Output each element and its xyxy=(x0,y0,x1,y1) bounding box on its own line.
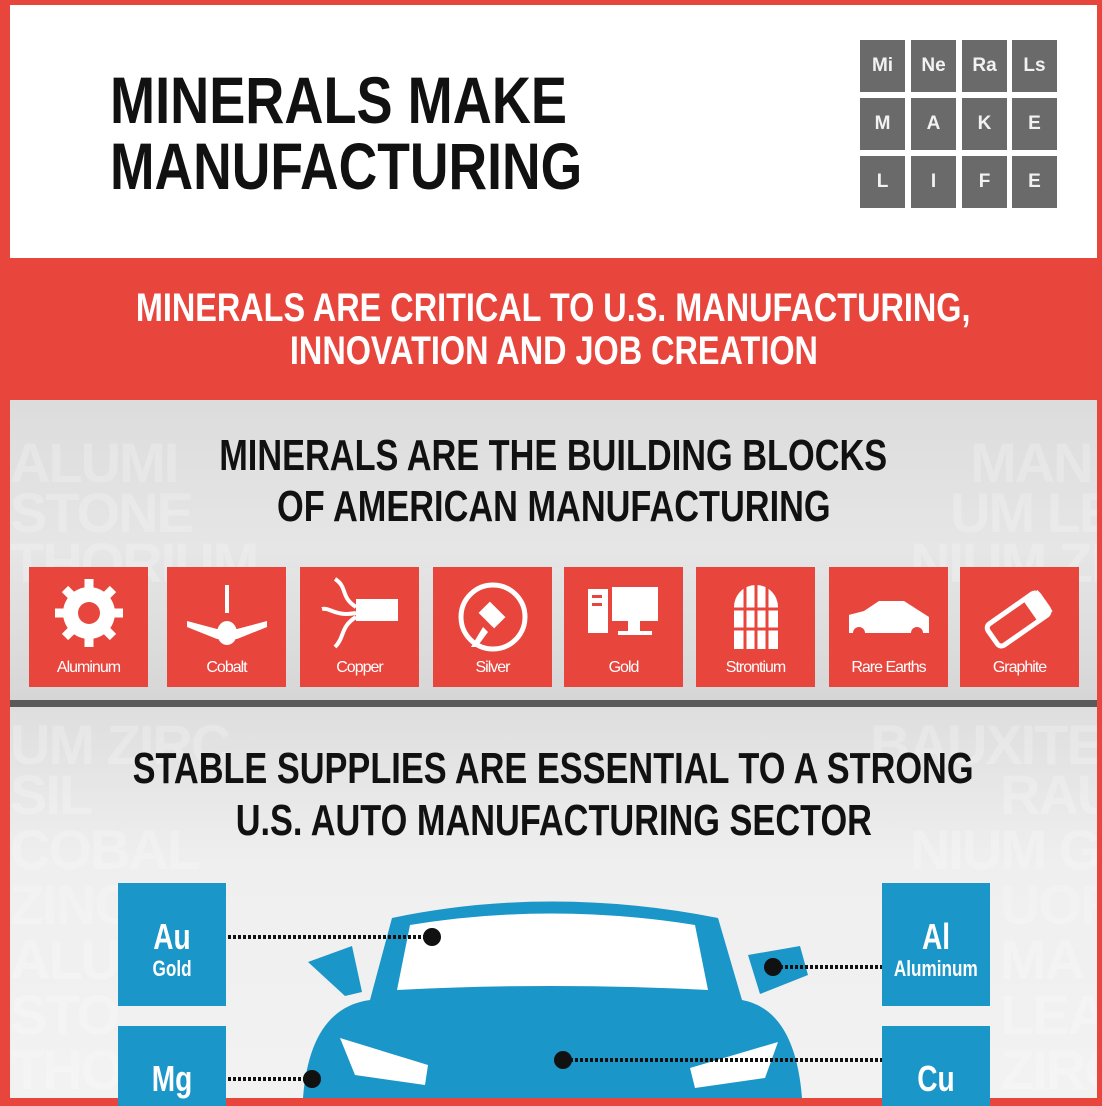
logo: minerals make life: M xyxy=(875,113,890,134)
panel: auto manufacturing: ALU xyxy=(10,928,119,991)
panel: building blocks: MAN xyxy=(970,431,1092,494)
tile: gold xyxy=(564,567,683,687)
heading: auto sector: U.S. AUTO MANUFACTURING SECTOR xyxy=(235,796,872,845)
tile: silver xyxy=(433,567,552,687)
red banner headline xyxy=(136,286,971,373)
car illustration xyxy=(303,902,808,1098)
element box: Cu: Cu xyxy=(917,1058,955,1099)
tile: rare earths: Rare Earths xyxy=(851,659,926,676)
panel: building blocks: STONE xyxy=(10,481,192,544)
tile: aluminum: Aluminum xyxy=(57,659,120,676)
red banner headline: INNOVATION AND JOB CREATION xyxy=(289,329,817,373)
panel: auto manufacturing: BAUXITE xyxy=(870,713,1097,776)
panel: building blocks: THORIUM xyxy=(10,531,257,594)
tile: graphite xyxy=(960,567,1079,687)
panel: auto manufacturing: SIL xyxy=(10,763,91,826)
heading: building blocks xyxy=(220,431,887,531)
logo: minerals make life: I xyxy=(931,171,936,192)
heading: auto sector xyxy=(133,744,974,845)
element box: Au gold: Gold xyxy=(152,956,192,981)
divider bar xyxy=(10,700,1097,707)
tile: silver: Silver xyxy=(475,659,510,676)
panel: auto manufacturing: COBAL xyxy=(10,818,199,881)
logo: minerals make life: L xyxy=(877,171,888,192)
logo: minerals make life: E xyxy=(1028,113,1041,134)
element box: Au gold xyxy=(118,883,226,1006)
tile: copper xyxy=(300,567,419,687)
panel: auto manufacturing: ZINC xyxy=(10,873,133,936)
logo: minerals make life: Mi xyxy=(872,55,893,76)
heading: building blocks: MINERALS ARE THE BUILDING BLOCKS xyxy=(220,431,887,480)
logo: minerals make life: A xyxy=(927,113,940,134)
tile: copper: Copper xyxy=(336,659,383,676)
element box: Al aluminum xyxy=(882,883,990,1006)
tile: strontium xyxy=(696,567,815,687)
logo: minerals make life: F xyxy=(979,171,990,192)
red banner headline: MINERALS ARE CRITICAL TO U.S. MANUFACTURING, xyxy=(136,286,971,330)
tile: aluminum xyxy=(29,567,148,687)
element box: Au gold: Au xyxy=(153,916,191,957)
logo: minerals make life: E xyxy=(1028,171,1041,192)
panel: auto manufacturing: UM ZIRC xyxy=(10,713,229,776)
title: MANUFACTURING xyxy=(110,129,582,203)
logo: minerals make life: K xyxy=(978,113,991,134)
header panel xyxy=(10,5,1097,258)
connector lines xyxy=(228,928,882,1088)
element box: Al aluminum: Aluminum xyxy=(894,956,978,981)
panel: building blocks: ALUMI xyxy=(10,431,177,494)
tile: strontium: Strontium xyxy=(726,659,785,676)
panel: auto manufacturing: STO xyxy=(10,983,118,1046)
tile: cobalt: Cobalt xyxy=(206,659,247,676)
element box: Mg: Mg xyxy=(152,1058,192,1099)
tile: graphite: Graphite xyxy=(993,659,1046,676)
title xyxy=(110,63,582,203)
panel: auto manufacturing xyxy=(10,707,1097,1098)
tile: gold: Gold xyxy=(609,659,638,676)
logo: minerals make life: Ne xyxy=(921,55,946,76)
heading: auto sector: STABLE SUPPLIES ARE ESSENTIAL TO A STRONG xyxy=(133,744,974,793)
logo: minerals make life: Ls xyxy=(1023,55,1046,76)
element box: Al aluminum: Al xyxy=(922,916,950,957)
element box: Mg xyxy=(118,1026,226,1106)
element box: Cu xyxy=(882,1026,990,1106)
tile: rare earths xyxy=(829,567,948,687)
title: MINERALS MAKE xyxy=(110,63,567,137)
tile: cobalt xyxy=(167,567,286,687)
panel: auto manufacturing: MA xyxy=(1000,928,1083,991)
heading: building blocks: OF AMERICAN MANUFACTURING xyxy=(277,482,830,531)
panel: building blocks xyxy=(10,400,1097,700)
logo: minerals make life: Ra xyxy=(972,55,997,76)
logo: minerals make life xyxy=(860,40,1057,208)
